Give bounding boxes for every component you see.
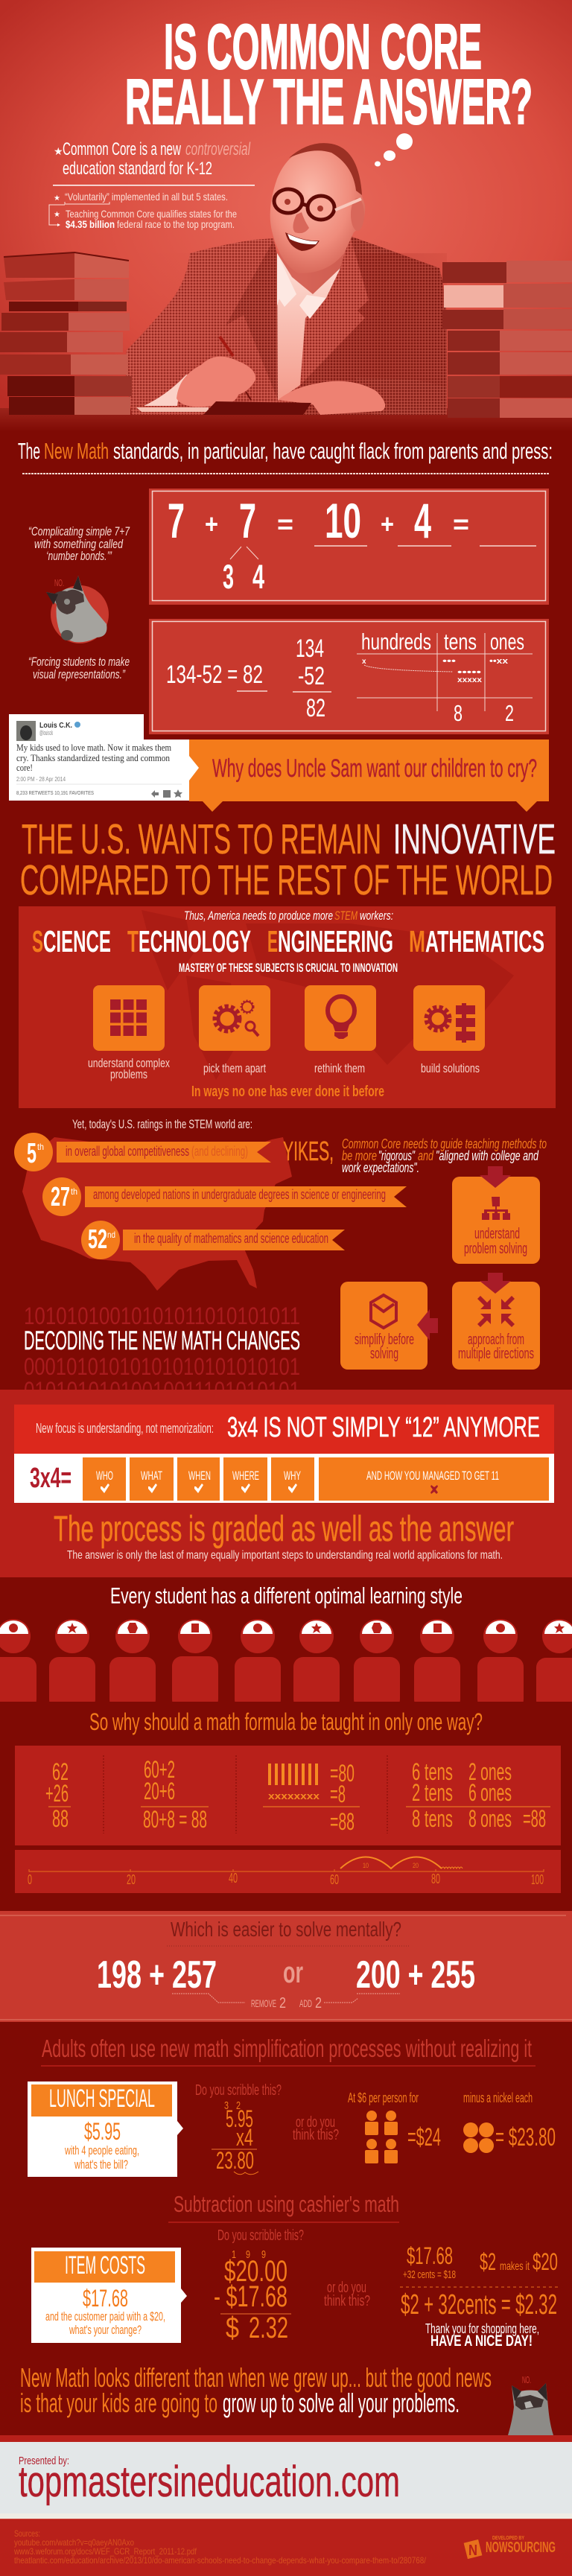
footer <box>0 2519 572 2576</box>
tweet card: core! <box>16 762 33 773</box>
panel: visual representation: hundreds <box>361 629 431 655</box>
panel: number bonds: = <box>277 509 293 539</box>
card: item costs <box>31 2248 187 2343</box>
panel: number bonds <box>149 489 549 605</box>
panel: presented by <box>0 2442 572 2519</box>
flow: approach from multiple directions: approach from <box>468 1332 524 1348</box>
flow: simplify before solving <box>340 1282 438 1370</box>
tweet card: My kids used to love math. Now it makes them <box>16 742 171 753</box>
icon: converging arrows <box>477 1296 515 1327</box>
panel: STEM: MASTERY OF THESE SUBJECTS IS CRUCIAL TO INNOVATION <box>179 961 398 975</box>
panel: four addition methods: =88 <box>523 1805 546 1832</box>
card: item costs: ITEM COSTS <box>65 2251 145 2280</box>
icon: four nickels <box>463 2122 494 2153</box>
panel: four addition methods: =88 <box>330 1808 355 1835</box>
card: lunch special <box>28 2082 183 2177</box>
number line: 80 <box>431 1871 440 1886</box>
panel: four addition methods: 6 tens <box>412 1758 453 1785</box>
panel: STEM: In ways no one has ever done it before <box>191 1084 384 1100</box>
heading: cashier's math: Subtraction using cashier's math <box>174 2191 399 2217</box>
rating: 5th: th <box>37 1142 44 1152</box>
section: mental math: 2 <box>279 1995 286 2011</box>
callout: yikes: work expectations". <box>342 1160 419 1175</box>
icon labels: rethink them <box>314 1061 365 1075</box>
logo: nowsourcing: N <box>468 2542 477 2559</box>
sources: Sources: <box>14 2528 40 2539</box>
lunch: written calculation: x4 <box>236 2124 253 2151</box>
neck <box>277 238 350 319</box>
icon: hierarchy <box>482 1197 510 1220</box>
logo: nowsourcing <box>464 2536 556 2559</box>
section: mental math: ADD <box>299 1997 312 2009</box>
panel: question checklist <box>14 1454 554 1503</box>
STEM words: E <box>267 924 278 958</box>
item: written calculation <box>214 2227 304 2344</box>
map: United States <box>22 1137 292 1291</box>
intro bullets: “Voluntarily” implemented in all but 5 states. <box>65 191 228 203</box>
lunch: or do you think this: think this? <box>293 2127 339 2143</box>
icon labels: build solutions <box>421 1061 480 1075</box>
panel: question checklist: WHO <box>96 1469 113 1483</box>
icon: grumpy cat: NO. <box>54 577 64 588</box>
tweet card: 8,233 RETWEETS 10,191 FAVORITES <box>16 791 94 796</box>
sources: youtube.com/watch?v=q0aeyAN0Axo <box>14 2537 134 2548</box>
lunch: written calculation: 23.80 <box>216 2147 254 2174</box>
panel: new focus <box>14 1405 554 1454</box>
quote: visual representations <box>28 655 130 681</box>
sources: www3.weforum.org/docs/WEF_GCR_Report_2011-12.pdf <box>13 2546 197 2557</box>
panel: STEM: workers: <box>360 909 393 923</box>
panel: visual representation: ••••• <box>457 668 481 677</box>
flow: problem solving: problem solving <box>464 1241 527 1257</box>
tweet card: Louis C.K. <box>39 722 72 730</box>
heading: decoding with binary rows <box>24 1303 300 1404</box>
item: mental calculation <box>400 2242 561 2350</box>
panel: question checklist: 3x4= <box>30 1463 72 1494</box>
panel: number bonds: 7 <box>168 493 185 548</box>
panel: four addition methods: 20+6 <box>144 1778 175 1804</box>
icon: box <box>371 1295 396 1328</box>
panel: question checklist: WHEN <box>188 1469 211 1483</box>
card: lunch special: LUNCH SPECIAL <box>49 2084 155 2113</box>
section: mental math: Which is easier to solve mentally? <box>171 1918 401 1941</box>
rating: 27th: among developed nations in undergraduate degrees in science or engineering <box>93 1187 386 1202</box>
STEM words: S <box>32 924 43 958</box>
rating: 52nd <box>81 1221 345 1259</box>
item: or do you think this: or do you <box>327 2280 366 2296</box>
lunch: written calculation <box>195 2082 282 2175</box>
panel: visual representation: x <box>362 658 366 666</box>
hero section <box>0 0 572 432</box>
heading: innovative <box>20 815 556 904</box>
item: written calculation: 9 <box>261 2248 266 2261</box>
tweet card: 2:00 PM - 28 Apr 2014 <box>16 776 66 783</box>
intro bullets <box>49 139 255 230</box>
section: mental math: 198 + 257 <box>97 1953 217 1997</box>
callout: yikes: "rigorous" <box>378 1148 416 1163</box>
intro bullets: controversial <box>185 139 250 159</box>
icon: grumpy cat footer: NO. <box>522 2374 531 2385</box>
item: mental calculation: $17.68 <box>407 2242 453 2269</box>
papers <box>136 407 209 412</box>
panel: question checklist: WHAT <box>141 1469 162 1483</box>
panel: visual representation: ••xx <box>489 657 509 666</box>
panel: four addition methods: 8 tens <box>412 1805 453 1832</box>
icon: grumpy cat <box>46 576 109 643</box>
lunch: or do you think this <box>293 2114 339 2143</box>
conclusion text: is that your kids are going to <box>20 2388 217 2418</box>
item: mental calculation: makes it <box>500 2260 530 2273</box>
panel: STEM: STEM <box>334 909 358 923</box>
panel: presented by: topmastersineducation.com <box>19 2458 400 2506</box>
panel: number bonds: 3 <box>223 558 234 596</box>
icon labels: problems <box>110 1067 147 1081</box>
item: written calculation: Do you scribble this? <box>217 2227 304 2244</box>
item: written calculation: - $17.68 <box>214 2280 287 2313</box>
STEM words: NGINEERING <box>278 924 393 958</box>
STEM words: CIENCE <box>43 924 111 958</box>
rating: 5th <box>14 1133 271 1171</box>
panel: four addition methods: =8 <box>330 1781 346 1807</box>
panel: four addition methods: 88 <box>52 1805 69 1832</box>
red band <box>0 2435 572 2442</box>
rating: 27th: 27 <box>51 1181 70 1212</box>
heading: decoding with binary rows: DECODING THE NEW MATH CHANGES <box>24 1326 300 1355</box>
card: item costs: what's your change? <box>69 2323 142 2337</box>
panel: four addition methods: 80+8 = 88 <box>143 1806 207 1833</box>
panel: four addition methods: +26 <box>45 1780 69 1807</box>
flow: simplify before solving: simplify before <box>355 1332 414 1348</box>
lunch: mental calculation: =$24 <box>407 2123 441 2152</box>
rating: 5th: (and declining) <box>191 1144 248 1159</box>
rating: 27th: th <box>71 1186 77 1197</box>
right book stack <box>442 261 572 418</box>
item: or do you think this: think this? <box>324 2293 370 2309</box>
tweet card <box>9 714 199 801</box>
panel: visual representation: 134-52 = 82 <box>166 661 263 689</box>
callout: yikes: be more <box>342 1148 377 1163</box>
sleeve cuff and wrist <box>144 375 195 406</box>
panel: visual representation: ones <box>490 629 524 655</box>
card: lunch special: with 4 people eating, <box>64 2143 139 2157</box>
number line: 60 <box>330 1872 339 1887</box>
item: written calculation: 9 <box>246 2248 250 2261</box>
panel: four addition methods: 6 ones <box>468 1779 512 1806</box>
panel: STEM: Thus, America needs to produce more <box>184 909 333 923</box>
row of students <box>0 1619 572 1711</box>
lunch: written calculation: 5.95 <box>226 2105 253 2132</box>
flow: problem solving <box>452 1166 540 1264</box>
card: lunch special: what's the bill? <box>74 2157 128 2172</box>
panel: visual representation: ••• <box>442 657 456 666</box>
number line: 20 <box>127 1872 136 1887</box>
right lapel <box>300 236 369 385</box>
heading: decoding with binary rows: 01010101010010011101010101 <box>24 1377 300 1404</box>
item: written calculation: 2.32 <box>249 2312 288 2344</box>
thought bubbles <box>375 133 413 167</box>
rating: 52nd: nd <box>107 1230 115 1240</box>
hair <box>289 143 362 195</box>
panel: four addition methods: xxxxxxxx <box>268 1790 320 1801</box>
right sleeve <box>355 378 447 415</box>
title <box>125 12 533 138</box>
panel: visual representation: xxxxx <box>457 676 483 684</box>
mouth <box>285 232 320 251</box>
icon: light bulb <box>305 985 376 1051</box>
panel: STEM <box>19 906 556 1108</box>
item: mental calculation: HAVE A NICE DAY! <box>430 2332 533 2350</box>
quote: number bonds: ‘number bonds.’” <box>46 549 112 563</box>
new math heading: New Math <box>44 438 109 464</box>
intro bullets: federal race to the top program. <box>117 218 235 230</box>
panel: four addition methods: 2 tens <box>412 1779 453 1806</box>
panel: visual representation: 134 <box>296 635 324 663</box>
panel: visual representation: -52 <box>298 662 325 690</box>
panel: visual representation: 82 <box>306 694 325 722</box>
icon: grumpy cat footer <box>508 2374 553 2435</box>
tweet card: @louisck <box>39 729 53 737</box>
head <box>270 144 365 273</box>
heading: decoding with binary rows: 10101010010101011010101011 <box>24 1303 300 1329</box>
panel: number bonds: = <box>453 509 469 539</box>
panel: presented by: Presented by: <box>19 2455 69 2467</box>
panel: number bonds: 7 <box>239 493 256 548</box>
card: item costs: $17.68 <box>83 2285 128 2312</box>
rating: 5th: in overall global competitiveness <box>66 1144 189 1159</box>
item: mental calculation: $20 <box>533 2248 558 2275</box>
rating: 52nd: in the quality of mathematics and science education <box>134 1231 328 1246</box>
pen <box>220 337 233 356</box>
section: mental math: 200 + 255 <box>356 1953 475 1997</box>
icon labels: understand complex <box>88 1056 170 1070</box>
panel: number bonds: 10 <box>325 493 361 548</box>
quote: visual representations: “Forcing students to make <box>28 655 130 669</box>
sources: theatlantic.com/education/archive/2013/10/do-american-schools-need-to-change-depends-what-you-compare-them-to/280768/ <box>14 2555 427 2566</box>
intro bullets: ★ <box>54 145 63 157</box>
panel: four addition methods: 2 ones <box>468 1758 512 1785</box>
logo: nowsourcing: DEVELOPED BY <box>492 2536 524 2541</box>
icon: gear and modules <box>413 985 485 1051</box>
quote: number bonds <box>28 524 130 563</box>
quote: number bonds: with something called <box>34 537 123 551</box>
section: mental math: REMOVE <box>251 1997 276 2009</box>
intro bullets: Common Core is a new <box>63 139 181 159</box>
icon labels: pick them apart <box>203 1061 266 1075</box>
lunch: written calculation: Do you scribble this? <box>195 2082 282 2099</box>
section: mental math: 2 <box>315 1995 322 2011</box>
left lapel <box>226 241 278 400</box>
number line <box>15 1850 561 1893</box>
STEM words <box>32 924 544 958</box>
callout: yikes <box>283 1136 547 1175</box>
panel: question checklist: WHY <box>284 1469 301 1483</box>
new math heading: The <box>18 438 40 464</box>
rating: 27th <box>42 1177 407 1216</box>
panel: four addition methods <box>15 1746 561 1845</box>
card: item costs: and the customer paid with a $20, <box>45 2309 165 2324</box>
panel: visual representation <box>149 619 549 734</box>
panel: new focus: New focus is understanding, not memorization: <box>36 1421 214 1436</box>
icon: grid <box>93 985 165 1051</box>
callout: yikes: and <box>418 1148 434 1163</box>
panel: visual representation: 2 <box>505 700 514 726</box>
panel: number bonds: + <box>381 509 394 539</box>
item: written calculation: $20.00 <box>224 2255 287 2288</box>
panel: visual representation: 8 <box>454 700 463 726</box>
jacket <box>125 236 447 415</box>
number line: 0 <box>28 1872 32 1887</box>
glasses <box>274 189 334 220</box>
sources <box>13 2528 427 2566</box>
US ratings section <box>14 1117 407 1291</box>
section: understanding <box>0 1390 572 1577</box>
callout: yikes: YIKES, <box>283 1136 334 1166</box>
item: mental calculation: +32 cents = $18 <box>403 2268 456 2281</box>
item: mental calculation: $2 <box>480 2248 496 2275</box>
panel: number bonds: 4 <box>252 558 264 596</box>
number line: 10 <box>363 1862 369 1869</box>
lunch: or do you think this: or do you <box>296 2114 335 2131</box>
flow: simplify before solving: solving <box>370 1346 398 1362</box>
teacher illustration <box>125 143 447 415</box>
STEM words: T <box>127 924 139 958</box>
panel: visual representation: tens <box>444 629 477 655</box>
item: written calculation: $ <box>226 2312 239 2344</box>
icon labels <box>88 1056 480 1081</box>
new math heading <box>18 438 553 474</box>
item: written calculation: 1 <box>232 2248 236 2261</box>
icon: four people <box>365 2111 398 2163</box>
icon: gears and magnifier <box>199 985 270 1051</box>
intro bullets: education standard for K-12 <box>63 159 212 179</box>
intro bullets: $4.35 billion <box>66 218 115 230</box>
US ratings section: Yet, today's U.S. ratings in the STEM world are: <box>72 1117 252 1131</box>
panel: four addition methods: 62 <box>52 1758 69 1785</box>
heading: decoding with binary rows: 00010101010101010101010101 <box>24 1353 300 1380</box>
conclusion text <box>20 2362 492 2418</box>
lunch: mental calculation <box>348 2090 556 2163</box>
tweet card: cry. Thanks standardized testing and common <box>16 752 170 763</box>
panel: number bonds: + <box>205 509 218 539</box>
writing hand <box>177 357 255 407</box>
panel: four addition methods: 60+2 <box>144 1756 175 1783</box>
section: mental math <box>0 1911 572 2022</box>
flow: problem solving: understand <box>474 1226 520 1242</box>
number line: 40 <box>229 1871 238 1886</box>
panel: question checklist: WHERE <box>232 1469 259 1483</box>
orange banner <box>189 740 549 812</box>
quote: number bonds: “Complicating simple 7+7 <box>28 524 130 538</box>
flow: approach from multiple directions <box>452 1273 540 1370</box>
number line: 100 <box>531 1872 544 1887</box>
lunch: written calculation: 3 <box>224 2099 229 2112</box>
panel: four addition methods: =80 <box>330 1760 355 1787</box>
card: lunch special: $5.95 <box>84 2118 121 2145</box>
intro bullets: ★ <box>54 194 60 203</box>
shirt <box>277 253 340 401</box>
number line: 20 <box>413 1862 419 1869</box>
panel: number bonds: 4 <box>414 493 431 548</box>
intro bullets: Teaching Common Core qualifies states for the <box>66 208 237 220</box>
lunch: written calculation: 2 <box>236 2099 241 2112</box>
left book stack <box>0 252 132 415</box>
lunch: mental calculation: At $6 per person for <box>348 2090 419 2105</box>
flat hand <box>278 381 385 415</box>
quote: visual representations: visual representations.” <box>33 667 126 681</box>
rating: 5th: 5 <box>27 1138 36 1169</box>
panel: four addition methods: 8 ones <box>468 1805 512 1832</box>
STEM words: ECHNOLOGY <box>139 924 251 958</box>
section: mental math: or <box>283 1956 303 1989</box>
rating: 52nd: 52 <box>88 1224 107 1254</box>
item: or do you think this <box>324 2280 370 2309</box>
STEM words: M <box>409 924 425 958</box>
intro bullets: ★ <box>54 211 60 219</box>
